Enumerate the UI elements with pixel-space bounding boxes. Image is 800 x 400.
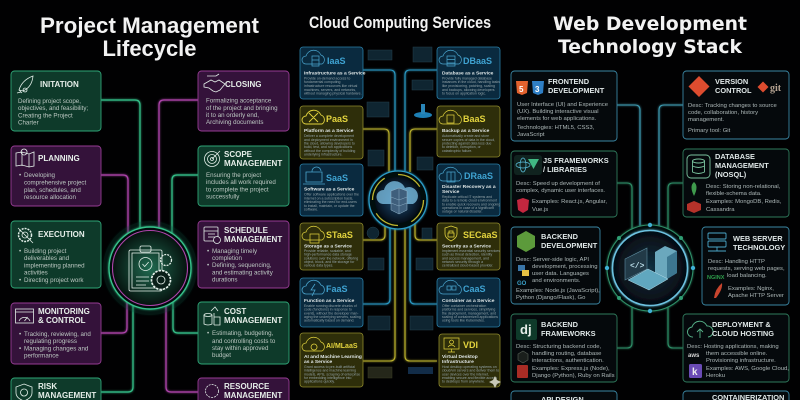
- card: DBaaS: instances in the cloud, handling tasks: [442, 80, 500, 84]
- card: deployment and cloud hosting: Heroku: [706, 373, 725, 379]
- card: STaaS: solutions over the network, offering: [304, 256, 358, 260]
- card: backend frameworks: handling routing, database: [532, 351, 602, 357]
- title: web development technology stack: Technology Stack: [558, 36, 742, 58]
- card: AI/MLaaS: models, APIs, scraping of enterprise: [304, 372, 360, 376]
- card: monitoring and control: •: [19, 331, 21, 338]
- card: deployment and cloud hosting: [683, 314, 789, 382]
- card: execution: •: [19, 277, 21, 284]
- card: PaaS: Platform as a Service: [304, 128, 354, 134]
- card: CaaS: CaaS: [463, 284, 486, 294]
- icon: cloud upload: [687, 321, 713, 338]
- card: backend frameworks: Examples: Express.js (Node),: [532, 366, 610, 372]
- card: DBaaS: Provide fully managed database: [442, 76, 492, 80]
- card: BaaS: Backup as a Service: [442, 128, 490, 134]
- card: risk management: [11, 378, 101, 400]
- card: AI/MLaaS: applications quickly.: [304, 380, 335, 384]
- card: DRaaS: Replicate critical IT systems and: [442, 195, 492, 199]
- icon: django: dj: [520, 322, 532, 337]
- card: JS frameworks: [511, 151, 617, 217]
- card: web server technology: [702, 227, 789, 305]
- card: version control: VERSION: [715, 77, 748, 86]
- card: monitoring and control: regulating progress: [24, 338, 77, 345]
- card: deployment and cloud hosting: Desc: Hosting applications, making: [687, 344, 779, 350]
- card: IaaS: [300, 47, 366, 99]
- card: CaaS: Offer container orchestration: [442, 304, 486, 308]
- card: execution: deliverables and: [24, 255, 70, 262]
- icon: storage cloud: [302, 226, 324, 243]
- card: execution: Directing project work: [24, 277, 84, 284]
- card: FaaS: events, without the developer man-: [304, 311, 359, 315]
- card: planning: PLANNING: [38, 154, 80, 163]
- card: cost management: MANAGEMENT: [224, 316, 282, 325]
- card: closing: [198, 71, 289, 131]
- title: web development technology stack: [553, 13, 747, 58]
- card: SECaaS: [437, 223, 500, 270]
- card: planning: resource allocation: [24, 194, 76, 201]
- card: monitoring and control: •: [19, 346, 21, 352]
- card: version control: code, collaboration, history: [688, 110, 758, 116]
- card: STaaS: high-performance data storage: [304, 253, 352, 257]
- card: backend frameworks: BACKEND: [541, 320, 579, 329]
- card: planning: comprehensive project: [24, 180, 87, 186]
- icon: redis: [687, 201, 701, 213]
- decorative thumbnails: [367, 47, 433, 378]
- title: web development technology stack: Web Development: [553, 13, 747, 35]
- card: schedule management: Defining, sequencing,: [212, 262, 272, 269]
- card: FaaS: aging the underlying servers, scaling: [304, 315, 361, 319]
- card: risk management: RISK: [38, 382, 57, 391]
- icon: calendar: [204, 227, 220, 244]
- card: cost management: •: [207, 330, 209, 337]
- logo: git: git: [770, 83, 782, 94]
- icon: gear people: [206, 384, 218, 398]
- card: frontend development: (UX). Building interactive visual: [517, 109, 599, 115]
- card: backend frameworks: FRAMEWORKS: [541, 329, 596, 338]
- card: initiation: objectives, and feasibility;: [18, 105, 88, 112]
- card: SECaaS: Implement essential security services: [442, 249, 500, 253]
- title: project management lifecycle: Project Management: [40, 13, 260, 38]
- card: resource management: RESOURCE: [224, 382, 270, 391]
- card: schedule management: Managing timely: [212, 248, 258, 255]
- hub: laptop and server: </>: [630, 262, 645, 271]
- card: VDI: [439, 334, 500, 387]
- icon: recovery cloud: [439, 167, 461, 182]
- sparkle mark: [489, 376, 501, 388]
- card: VDI: user devices over the internet,: [442, 372, 489, 376]
- card: SECaaS: SECaaS: [463, 230, 498, 240]
- card: cost management: Estimating, budgeting,: [212, 330, 274, 337]
- card: backend development: Desc: Server-side logic, API: [516, 257, 589, 263]
- card: PaaS: underlying infrastructure.: [304, 153, 343, 157]
- card: web server technology: TECHNOLOGY: [733, 243, 785, 252]
- icon: handshake: [204, 74, 225, 92]
- title: cloud computing services: Cloud Computing Services: [309, 14, 491, 32]
- card: monitoring and control: [11, 303, 101, 364]
- card: FaaS: [300, 278, 363, 327]
- card: frontend development: DEVELOPMENT: [548, 86, 605, 95]
- card: scope management: SCOPE: [224, 150, 253, 159]
- card: web server technology: Apache HTTP Server: [728, 293, 784, 299]
- icon: virtual desktop: [444, 338, 459, 352]
- card: STaaS: STaaS: [326, 230, 353, 240]
- card: FaaS: FaaS: [326, 284, 348, 294]
- card: frontend development: elements for web applications.: [517, 116, 597, 122]
- card: monitoring and control: Tracking, reviewing, and: [24, 331, 91, 338]
- card: CaaS: platforms and services, simplifying: [442, 308, 495, 312]
- card: backend frameworks: Django (Python), Ruby on Rails: [532, 373, 615, 379]
- card: SECaaS: such as threat detection, identity: [442, 253, 492, 257]
- card: database management: Examples: MongoDB, Redis,: [706, 199, 782, 205]
- icon: react and vue: [514, 155, 542, 175]
- card: initiation: Creating the Project: [18, 112, 73, 120]
- card: database management: [683, 149, 789, 217]
- icon: target: [204, 151, 220, 166]
- card: frontend development: [511, 71, 617, 141]
- card: scope management: includes all work required: [206, 179, 276, 186]
- card: BaaS: protecting against data loss due: [442, 142, 491, 146]
- card: scope management: to complete the project: [206, 186, 269, 194]
- card: IaaS: machines, servers, and networks,: [304, 88, 356, 92]
- card: DBaaS: DBaaS: [463, 56, 492, 66]
- card: schedule management: durations: [212, 276, 237, 284]
- card: backend development: BACKEND: [541, 232, 579, 241]
- hub: clipboard and gears: [103, 221, 197, 315]
- card: AI/MLaaS: as a Service: [304, 359, 333, 365]
- card: SaaS: eliminating the need for end-users: [304, 200, 357, 204]
- card: schedule management: MANAGEMENT: [224, 235, 282, 244]
- card: VDI: enabling secure and flexible access: [442, 376, 498, 380]
- card: frontend development: JavaScript: [517, 132, 545, 138]
- connectors: cloud: [363, 70, 437, 361]
- card: deployment and cloud hosting: Provisioning infrastructure.: [706, 358, 776, 364]
- card: JS frameworks: Desc: Speed up development of: [516, 181, 600, 187]
- card: JS frameworks: Vue.js: [532, 207, 548, 213]
- card: JS frameworks: Examples: React.js, Angular,: [532, 199, 607, 205]
- card: web server technology: load balancing.: [727, 273, 767, 279]
- card: cost management: budget: [212, 352, 231, 359]
- card: monitoring and control: Managing changes and: [24, 346, 89, 352]
- card: DBaaS: to focus on application logic.: [442, 92, 486, 96]
- card: version control: Primary tool: Git: [688, 128, 731, 134]
- card: cost management: and controlling costs to: [212, 338, 276, 345]
- card: DRaaS: [437, 164, 500, 216]
- card: DRaaS: DRaaS: [464, 171, 493, 181]
- icon: html5 css3: 5: [519, 85, 524, 94]
- card: initiation: INITATION: [40, 80, 79, 89]
- card: VDI: Host desktop operating systems on: [442, 365, 497, 369]
- icon: gears: [18, 228, 33, 243]
- icon: git diamond: [688, 76, 710, 97]
- icon: cloud server: [302, 50, 324, 66]
- card: FaaS: Function as a Service: [304, 298, 355, 304]
- card: cost management: COST: [224, 307, 246, 316]
- card: schedule management: •: [207, 248, 209, 255]
- card: JS frameworks: JS FRAMEWORKS: [543, 156, 609, 165]
- card: schedule management: [198, 221, 289, 288]
- card: DBaaS: [437, 47, 500, 99]
- card: BaaS: catastrophic failure.: [442, 149, 472, 153]
- card: closing: Archiving documents: [206, 119, 263, 126]
- card: SECaaS: Security as a Service: [442, 244, 491, 250]
- card: backend development: Examples: Node.js (JavaScript),: [516, 288, 600, 294]
- title: project management lifecycle: [40, 13, 260, 61]
- card: STaaS: Storage as a Service: [304, 244, 352, 250]
- card: DBaaS: and backups, allowing developers: [442, 88, 495, 92]
- panel: web development technology stack: [511, 13, 789, 400]
- icon: security shield: [445, 226, 457, 241]
- card: schedule management: and estimating activity: [212, 270, 274, 276]
- card: monitoring and control: MONITORING: [38, 307, 90, 316]
- card: IaaS: infrastructure resources like virtual: [304, 84, 358, 88]
- card: DRaaS: operations in case of a significant: [442, 206, 494, 210]
- card: SaaS: SaaS: [326, 173, 348, 183]
- card: cost management: stay within approved: [212, 345, 269, 352]
- card: database management: Cassandra: [706, 207, 735, 213]
- hub: laptop and server: [605, 223, 695, 313]
- icon: database: [687, 155, 710, 178]
- card: initiation: Charter: [18, 120, 39, 126]
- card: PaaS: the cloud, allowing developers to: [304, 142, 355, 146]
- card: version control: Desc: Tracking changes to source: [688, 103, 777, 109]
- card: CaaS: [437, 278, 500, 327]
- card: SaaS: software.: [304, 208, 318, 212]
- card: closing: Formalizing acceptance: [206, 98, 272, 104]
- card: version control: CONTROL: [715, 86, 752, 95]
- card: web server technology: WEB SERVER: [733, 234, 783, 243]
- card: PaaS: build, test, and run applications: [304, 145, 353, 149]
- card: frontend development: User Interface (UI) and Experience: [517, 102, 609, 108]
- card: BaaS: Automatically create and store: [442, 134, 489, 138]
- card: backend development: and environments.: [532, 278, 581, 284]
- card: schedule management: •: [207, 262, 209, 269]
- card: AI/MLaaS: intelligence and machine learning: [304, 369, 356, 373]
- card: CaaS: the deployment, management, and: [442, 311, 496, 315]
- card: AI/MLaaS: for embedding intelligence into: [304, 376, 352, 380]
- icon: shield: [16, 384, 32, 400]
- card: AI/MLaaS: Grant access to pre-built artificial: [304, 365, 355, 369]
- card: backend frameworks: [511, 314, 617, 382]
- card: IaaS: Infrastructure as a Service: [304, 70, 366, 76]
- card: AI/MLaaS: AI and Machine Learning: [304, 354, 362, 360]
- logo: aws and heroku: [688, 353, 702, 378]
- card: FaaS: Enable running discrete chunks of: [304, 304, 357, 308]
- card: resource management: [198, 378, 289, 400]
- icon: html5 css3: 3: [535, 85, 540, 94]
- icon: python and go: GO: [517, 281, 527, 287]
- card: VDI: cloud/vm servers and deliver them to: [442, 369, 499, 373]
- card: execution: Building project: [24, 248, 67, 255]
- card: resource management: MANAGEMENT: [224, 391, 282, 400]
- card: scope management: Ensuring the project: [206, 172, 261, 179]
- card: database management: DATABASE: [715, 152, 755, 161]
- card: IaaS: fundamental computing: [304, 80, 340, 84]
- card: risk management: MANAGEMENT: [38, 391, 96, 400]
- card: database management: Desc: Storing non-relational,: [706, 184, 781, 190]
- card: AI/MLaaS: [300, 333, 363, 387]
- icon: cloud database: [439, 50, 461, 66]
- card: frontend development: Technologies: HTML5, CSS3,: [517, 125, 595, 131]
- icon: lightning cloud: [302, 280, 324, 296]
- card: BaaS: BaaS: [463, 114, 486, 124]
- card: VDI: to desktops from anywhere.: [442, 380, 485, 384]
- card: backend frameworks: Desc: Structuring backend code,: [516, 344, 601, 350]
- card: backend development: development, processing: [532, 264, 598, 270]
- card: initiation: Defining project scope,: [18, 98, 81, 105]
- card: containerization: [683, 391, 789, 400]
- card: CaaS: using tools like Kubernetes.: [442, 319, 485, 323]
- card: STaaS: object, block, and file storage for: [304, 260, 355, 264]
- icon: rocket: [17, 76, 33, 93]
- card: SECaaS: and access management, and: [442, 256, 489, 260]
- card: schedule management: completion: [212, 255, 242, 262]
- card: DRaaS: Disaster Recovery as a: [442, 184, 496, 190]
- card: deployment and cloud hosting: Examples: AWS, Google Cloud,: [706, 366, 789, 372]
- card: SaaS: Software as a Service: [304, 186, 355, 192]
- card: planning: •: [19, 172, 21, 179]
- card: web server technology: Examples: Nginx,: [728, 286, 774, 292]
- card: STaaS: Provide reliable, scalable, and: [304, 249, 351, 253]
- card: DRaaS: data to a remote cloud environment: [442, 199, 497, 203]
- card: schedule management: SCHEDULE: [224, 226, 269, 235]
- card: AI/MLaaS: AI/MLaaS: [326, 343, 358, 350]
- card: BaaS: [437, 106, 500, 157]
- card: execution: [11, 221, 101, 288]
- card: STaaS: various data types.: [304, 264, 333, 268]
- icon: laptop cloud: [303, 167, 325, 184]
- card: monitoring and control: performance: [24, 352, 59, 360]
- card: backend development: user data. Languages: [532, 271, 589, 277]
- card: initiation: [11, 71, 101, 131]
- icon: gauge: [16, 309, 34, 323]
- card: FaaS: code (functions) in response to: [304, 308, 352, 312]
- card: CaaS: Container as a Service: [442, 298, 495, 304]
- card: DRaaS: to enable quick recovery and ongoing: [442, 202, 500, 206]
- card: IaaS: Provide on-demand access to: [304, 76, 350, 80]
- card: SECaaS: centralized cloud-based provider.: [442, 264, 493, 268]
- card: JS frameworks: complex, dynamic user interfaces.: [516, 188, 605, 194]
- card: PaaS: and deployment environment in: [304, 138, 353, 142]
- card: PaaS: Deliver a complete development: [304, 134, 354, 138]
- card: database management: MANAGEMENT: [715, 161, 769, 170]
- card: BaaS: secure copies of data in the cloud,: [442, 138, 495, 142]
- card: DRaaS: outage or natural disaster.: [442, 210, 483, 214]
- icon: map: [16, 149, 34, 167]
- card: deployment and cloud hosting: them accessible online.: [706, 351, 768, 357]
- card: version control: [683, 71, 789, 139]
- card: IaaS: without managing physical hardware.: [304, 92, 362, 96]
- card: database management: flexible-schema data.: [706, 191, 762, 197]
- panel: cloud computing services: [300, 14, 501, 388]
- logo: aws and heroku: k: [692, 367, 698, 378]
- connectors: lifecycle: [101, 100, 198, 400]
- card: VDI: Virtual Desktop: [442, 354, 478, 360]
- card: deployment and cloud hosting: CLOUD HOSTING: [712, 329, 774, 338]
- card: execution: EXECUTION: [38, 230, 85, 239]
- icon: server rack: [708, 233, 726, 251]
- icon: coins and arrow: [204, 307, 220, 325]
- card: SaaS: to install, maintain, or update the: [304, 204, 355, 208]
- icon: node hexagon: [517, 231, 535, 252]
- card: planning: plan, schedules, and: [24, 187, 81, 194]
- card: execution: activities: [24, 270, 48, 276]
- logo: nginx and apache feather: NGINX: [707, 275, 725, 281]
- card: JS frameworks: / LIBRARIES: [543, 165, 587, 174]
- card: DRaaS: Service: [442, 189, 460, 195]
- card: execution: implementing planned: [24, 262, 85, 270]
- icon: express and rails: [517, 351, 528, 378]
- hub: cloud server: [369, 171, 427, 229]
- card: cost management: [198, 302, 289, 364]
- icon: mongodb leaf: [692, 182, 696, 196]
- card: SECaaS: network security through a: [442, 260, 483, 264]
- icon: angular: [517, 198, 529, 213]
- card: STaaS: [300, 223, 363, 270]
- card: deployment and cloud hosting: DEPLOYMENT &: [712, 320, 771, 329]
- icon: tools in cloud: [302, 110, 324, 124]
- logo: aws and heroku: aws: [688, 353, 700, 359]
- panel: project management lifecycle: [11, 13, 289, 400]
- card: SaaS: [300, 164, 363, 216]
- card: closing: it to an orderly end,: [206, 112, 259, 119]
- card: backend development: DEVELOPMENT: [541, 241, 598, 250]
- icon: AI head cloud: [302, 337, 324, 351]
- card: scope management: MANAGEMENT: [224, 159, 282, 168]
- card: DBaaS: like provisioning, patching, scaling: [442, 84, 495, 88]
- card: version control: management.: [688, 117, 724, 123]
- card: SaaS: internet on a subscription basis,: [304, 196, 353, 200]
- card: VDI: Infrastructure: [442, 359, 474, 365]
- card: SaaS: Offer software applications over the: [304, 192, 359, 196]
- card: backend development: [511, 227, 600, 304]
- card: backend development: Python (Django/Flask), Go: [516, 295, 586, 301]
- card: DBaaS: Database as a Service: [442, 70, 494, 76]
- card: scope management: successfully: [206, 194, 240, 200]
- card: planning: [11, 146, 101, 206]
- card: scope management: [198, 146, 289, 206]
- card: VDI: VDI: [463, 340, 478, 350]
- card: PaaS: PaaS: [326, 114, 348, 124]
- card: PaaS: without the complexity of building: [304, 149, 355, 153]
- icon: container cloud: [439, 280, 461, 294]
- card: backend frameworks: interactions, authentication.: [532, 358, 604, 364]
- title: project management lifecycle: Lifecycle: [102, 36, 196, 61]
- card: CaaS: scaling of containerized applications: [442, 315, 498, 319]
- connectors: web stack: [600, 105, 702, 400]
- card: web server technology: requests, serving web pages,: [708, 266, 785, 272]
- card: monitoring and control: & CONTROL: [38, 316, 86, 325]
- card: API design: [511, 391, 617, 400]
- card: planning: Developing: [24, 172, 56, 179]
- card: frontend development: FRONTEND: [548, 77, 590, 86]
- card: IaaS: IaaS: [327, 56, 346, 66]
- card: closing: CLOSING: [225, 80, 261, 89]
- card: execution: •: [19, 248, 21, 255]
- icon: backup cloud: [439, 110, 461, 124]
- card: FaaS: automatically based on demand.: [304, 319, 354, 323]
- card: web server technology: Desc: Handling HTTP: [708, 259, 765, 265]
- card: closing: of the project and bringing: [206, 105, 278, 112]
- card: BaaS: to deletion, corruption, or: [442, 145, 482, 149]
- card: database management: (NOSQL): [715, 170, 747, 179]
- card: PaaS: [300, 106, 363, 159]
- icon: html5 css3: [516, 81, 544, 95]
